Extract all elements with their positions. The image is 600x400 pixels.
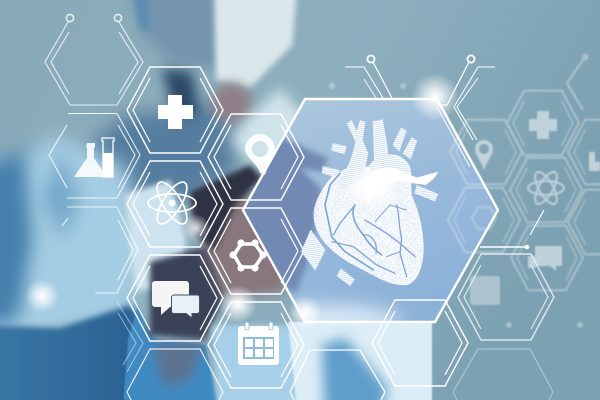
collar bbox=[232, 88, 312, 165]
white coat bottom right bbox=[288, 322, 432, 400]
hexagon: blank left bbox=[62, 207, 138, 293]
icon: map pin bbox=[245, 134, 275, 175]
icon: flask and test tube bbox=[74, 138, 114, 177]
hexagon: chat bbox=[127, 255, 223, 341]
lower hex light bbox=[212, 325, 300, 400]
main heart hexagon bbox=[235, 99, 498, 336]
faded hexagons bbox=[329, 54, 600, 328]
coat left bbox=[0, 135, 145, 335]
dark fingers bbox=[190, 165, 262, 250]
neck skin bbox=[212, 83, 252, 123]
hexagon: right calendar frame bbox=[458, 254, 554, 340]
blue glove cuff bbox=[122, 305, 222, 400]
fingers behind glass bbox=[244, 136, 406, 321]
icon: gear hexagon bbox=[231, 241, 265, 270]
lower sleeve bbox=[0, 305, 158, 400]
faded chat icon bbox=[528, 246, 562, 271]
hexagon: lower bbox=[127, 349, 223, 400]
icon: atom bbox=[148, 178, 196, 228]
surgeon cap bbox=[128, 0, 220, 70]
top left hexagon with pins bbox=[45, 14, 143, 105]
faded pin icon bbox=[475, 140, 493, 170]
coat fold bbox=[40, 150, 80, 240]
faded calendar icon bbox=[470, 276, 500, 305]
faded flask corner bbox=[589, 152, 600, 171]
right faded hexagon group bbox=[329, 54, 600, 328]
hexagon: atom bbox=[127, 161, 223, 247]
face shadow bbox=[162, 68, 200, 118]
hand bbox=[195, 185, 292, 300]
heart stipple body bbox=[314, 154, 424, 285]
icon: calendar bbox=[238, 322, 279, 365]
hexagon: bottom far right bbox=[453, 349, 553, 400]
dark wrist bbox=[150, 245, 225, 340]
hexagon: bottom centre bbox=[290, 350, 385, 400]
hexagon: lower left bbox=[117, 302, 143, 372]
heart illustration bbox=[301, 119, 438, 286]
heart soft base bbox=[314, 154, 424, 285]
light flares bbox=[25, 73, 459, 330]
face mask bbox=[214, 0, 298, 88]
hexagon: bottom right bbox=[372, 300, 468, 386]
faded atom icon bbox=[528, 169, 564, 207]
lapel bbox=[125, 180, 186, 290]
hexagon: gear bbox=[208, 208, 304, 294]
icon: cross bbox=[158, 95, 193, 129]
top connector lines bbox=[345, 55, 544, 249]
hexagon: calendar bbox=[208, 302, 304, 388]
coat left shadow bbox=[0, 150, 32, 325]
great vessels bbox=[301, 119, 438, 286]
scrubs chest bbox=[85, 105, 235, 200]
heart centre glow bbox=[352, 170, 392, 203]
icon: chat bubbles bbox=[152, 281, 200, 318]
cap stripe bbox=[133, 0, 150, 30]
hexagon: cross bbox=[127, 67, 223, 153]
faded cross icon bbox=[529, 111, 557, 139]
coronary veins bbox=[325, 173, 415, 277]
pulmonary trunk bbox=[362, 168, 438, 203]
hexagon: flask bbox=[49, 114, 140, 198]
hexagon: pin bbox=[208, 114, 304, 200]
bottom stripe bbox=[322, 338, 388, 400]
faded gear icon bbox=[472, 207, 496, 229]
faded icons bbox=[470, 111, 600, 305]
forearm bbox=[152, 342, 205, 388]
